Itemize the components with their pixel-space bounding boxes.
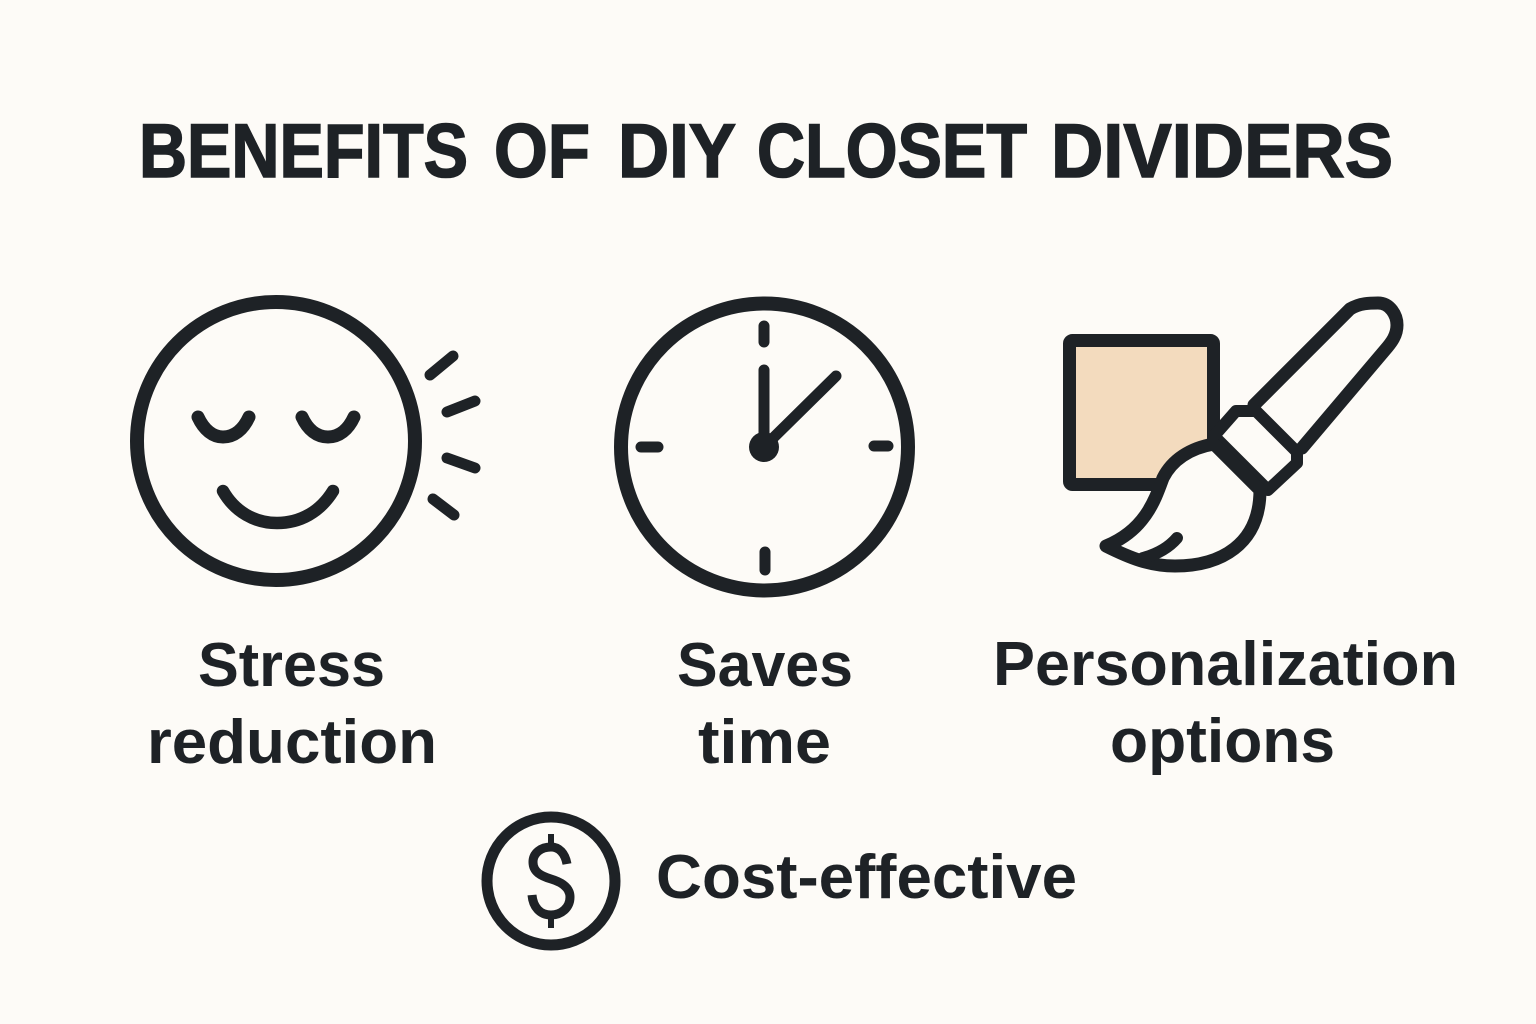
label: saves time: Saves: [677, 631, 853, 700]
label: personalization options: options: [1110, 707, 1335, 776]
title: BENEFITS: [139, 109, 468, 194]
title: OF: [494, 109, 590, 194]
title: DIVIDERS: [1051, 109, 1393, 194]
title: DIY: [618, 109, 736, 194]
label: stress reduction: [147, 631, 437, 777]
icon: clock: [621, 304, 908, 590]
label: personalization options: [993, 630, 1458, 776]
title: CLOSET: [757, 109, 1027, 194]
label: saves time: time: [698, 708, 831, 777]
title: [139, 109, 1393, 194]
icon: paint swatch and brush: [1070, 303, 1397, 566]
label: cost-effective: Cost-effective: [656, 843, 1077, 912]
label: stress reduction: reduction: [147, 708, 437, 777]
label: stress reduction: Stress: [198, 631, 385, 700]
icon: dollar coin: [487, 817, 615, 945]
label: personalization options: Personalization: [993, 630, 1458, 699]
icon: calm smiling face: [137, 302, 475, 580]
label: saves time: [677, 631, 853, 777]
